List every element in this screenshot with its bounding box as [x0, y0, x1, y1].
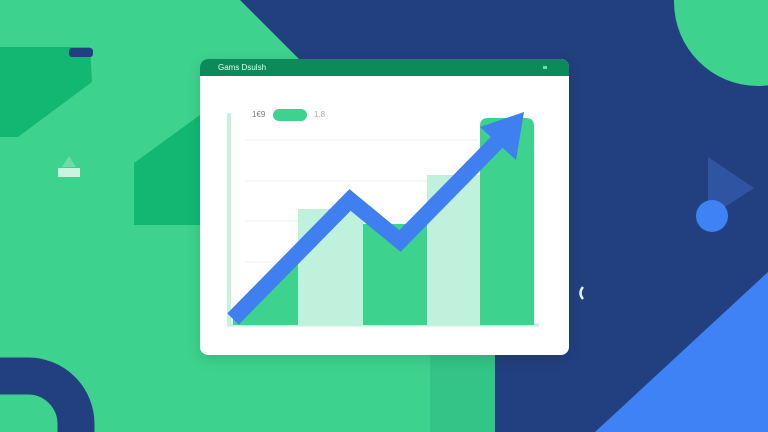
shape: navy pill	[69, 48, 93, 57]
shape: bottom-right blue triangle	[595, 272, 768, 432]
bar chart with trend arrow	[227, 112, 539, 327]
shape: left dark green panel	[0, 47, 92, 137]
shape: top-right green circle	[674, 0, 768, 86]
legend: labels and pill: 1.8	[314, 110, 325, 119]
background: navy region	[240, 0, 768, 432]
shadow below window	[430, 355, 495, 432]
legend: labels and pill	[252, 109, 325, 121]
window header	[200, 59, 569, 76]
shape: navy quarter ring	[0, 376, 76, 432]
window: chart dashboard	[200, 59, 569, 355]
icon: play triangle with dot	[696, 157, 754, 232]
shape: middle dark green panel	[134, 115, 210, 225]
icon: small chevron	[580, 287, 583, 299]
legend: labels and pill: 1€9	[252, 110, 265, 119]
icon: small triangle and bar	[58, 156, 80, 177]
window header: Gams Dsulsh	[218, 63, 266, 72]
